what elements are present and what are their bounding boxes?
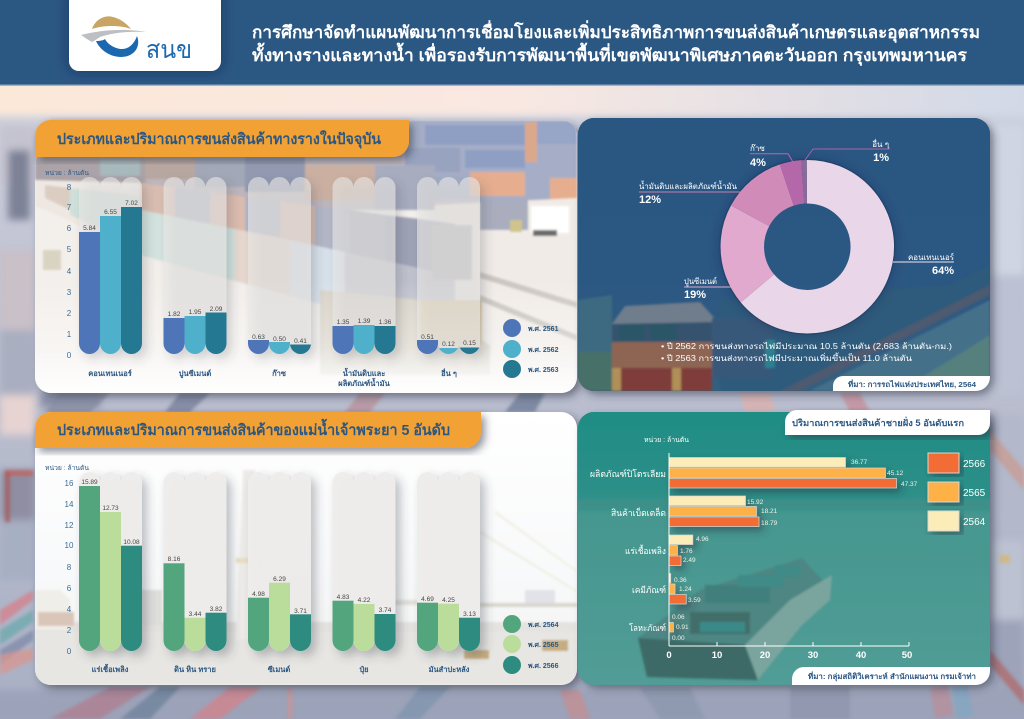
notes: • ปี 2563 การขนส่งทางรถไฟมีประมาณเพิ่มขึ้นเป็น 11.0 ล้านตัน (661, 352, 913, 363)
label: crude oil: 12% (639, 194, 661, 206)
bar value labels: 2.09 (210, 306, 223, 313)
label: crude oil (639, 180, 740, 206)
y axis labels: 4 (67, 267, 72, 276)
logo card (69, 0, 221, 71)
y axis labels: 12 (65, 521, 74, 530)
bar value labels: 1.82 (168, 311, 181, 318)
category names: สินค้าเบ็ดเตล็ด (611, 506, 666, 518)
label: cement: ปูนซีเมนต์ (684, 276, 717, 287)
photo: locomotive and tracks (578, 118, 990, 391)
category labels: ซีเมนต์ (268, 665, 290, 674)
source note (833, 376, 990, 391)
y axis labels: 2 (67, 309, 72, 318)
category labels: น้ำมันดิบและ (343, 367, 385, 378)
bar value labels: 1.35 (337, 319, 350, 326)
y axis labels: 6 (67, 224, 72, 233)
axis numbers: 30 (808, 650, 818, 661)
axis numbers: 40 (856, 650, 866, 661)
y axis labels: 5 (67, 245, 72, 254)
label: gas (750, 143, 793, 169)
label: containers: 64% (932, 265, 954, 277)
photo: containers and train (35, 120, 577, 393)
panel heading: ประเภทและปริมาณการขนส่งสินค้าของแม่น้ำเจ้าพระยา 5 อันดับ (57, 418, 450, 439)
legend: พ.ศ. 2565 (528, 642, 559, 649)
bar value labels: 4.69 (421, 596, 434, 603)
y axis labels: 4 (67, 605, 72, 614)
bar value labels: 3.82 (210, 606, 223, 613)
bar value labels: 3.71 (294, 608, 307, 615)
bar value labels: 5.84 (83, 225, 96, 232)
category labels: แร่เชื้อเพลิง (92, 663, 129, 674)
category labels: ปุ๋ย (359, 665, 369, 674)
bar values: 45.12 (887, 470, 904, 477)
bar values: 1.76 (680, 548, 693, 555)
y axis labels (45, 169, 90, 360)
source note: ที่มา: กลุ่มสถิติวิเคราะห์ สำนักแผนงาน กรมเจ้าท่า (808, 670, 976, 681)
label: cement: 19% (684, 289, 706, 301)
chart heading tab: ปริมาณการขนส่งสินค้าชายฝั่ง 5 อันดับแรก (792, 416, 964, 428)
legend (928, 453, 986, 531)
category names: เคมีภัณฑ์ (632, 584, 666, 595)
bar value labels: 4.83 (337, 594, 350, 601)
y axis labels: 3 (67, 288, 72, 297)
label: crude oil: น้ำมันดิบและผลิตภัณฑ์น้ำมัน (639, 180, 738, 191)
bar value labels: 6.29 (273, 576, 286, 583)
label: others: อื่น ๆ (872, 138, 889, 149)
y axis labels: 16 (65, 479, 74, 488)
bar value labels: 4.25 (442, 597, 455, 604)
y axis labels: หน่วย : ล้านตัน (45, 464, 90, 472)
chart heading tab (785, 410, 990, 435)
y axis labels: 0 (67, 647, 72, 656)
bar value labels: 0.63 (252, 334, 265, 341)
bar value labels: 4.22 (358, 597, 371, 604)
bar values: 36.77 (851, 459, 868, 466)
bar value labels: 0.41 (294, 338, 307, 345)
logo card: สนข (146, 36, 192, 64)
legend: พ.ศ. 2563 (528, 367, 559, 374)
bar value labels (81, 479, 476, 618)
source note: ที่มา: การรถไฟแห่งประเทศไทย, 2564 (848, 378, 977, 389)
category names: ผลิตภัณฑ์ปิโตรเลียม (590, 468, 666, 479)
bar values: 0.00 (672, 635, 685, 642)
bar values: 0.36 (674, 577, 687, 584)
label: gas: ก๊าซ (750, 143, 765, 153)
bar value labels: 12.73 (102, 505, 119, 512)
label: gas: 4% (750, 157, 766, 169)
legend (503, 319, 559, 378)
bar values: 18.21 (761, 508, 778, 515)
y axis labels: 7 (67, 203, 72, 212)
axis numbers (666, 650, 912, 661)
legend: พ.ศ. 2562 (528, 347, 559, 354)
main title (252, 20, 980, 66)
bar values: 47.37 (901, 481, 918, 488)
main title: การศึกษาจัดทำแผนพัฒนาการเชื่อมโยงและเพิ่มประสิทธิภาพการขนส่งสินค้าเกษตรและอุตสาหกรรม (252, 20, 980, 43)
bar value labels: 10.08 (123, 539, 140, 546)
y axis labels: 1 (67, 330, 72, 339)
bar value labels: 8.16 (168, 556, 181, 563)
axis numbers: 50 (902, 650, 912, 661)
bar value labels: 0.50 (273, 336, 286, 343)
donut chart (733, 173, 881, 321)
bar chart values (79, 207, 480, 358)
label: containers (893, 252, 955, 277)
panel heading: ประเภทและปริมาณการขนส่งสินค้าทางรางในปัจจุบัน (57, 130, 382, 149)
bar values: 3.59 (688, 597, 701, 604)
bar values (672, 459, 918, 642)
panel: rail donut chart (578, 118, 990, 391)
category labels: มันสำปะหลัง (429, 665, 470, 674)
bar value labels: 15.89 (81, 479, 98, 486)
y axis labels: 2 (67, 626, 72, 635)
bar value labels: 0.51 (421, 334, 434, 341)
bar value labels: 1.36 (379, 319, 392, 326)
category names: โลหะภัณฑ์ (629, 622, 666, 633)
bar value labels: 6.55 (104, 209, 117, 216)
bar value labels: 1.95 (189, 309, 202, 316)
panel: rail freight (35, 120, 577, 393)
bar value labels: 3.44 (189, 611, 202, 618)
bar value labels: 3.13 (463, 611, 476, 618)
bar value labels: 7.02 (125, 200, 138, 207)
category labels: ปูนซีเมนต์ (179, 369, 211, 379)
legend: 2566 (963, 459, 986, 470)
legend: 2565 (963, 488, 986, 499)
panel heading (35, 412, 481, 448)
label: others (805, 138, 889, 164)
notes (661, 342, 952, 363)
bar values: 0.06 (672, 614, 685, 621)
category labels: อื่น ๆ (441, 367, 457, 378)
y axis labels: 8 (67, 563, 72, 572)
category names: แร่เชื้อเพลิง (625, 544, 666, 556)
legend: พ.ศ. 2566 (528, 663, 559, 670)
header band (0, 0, 1024, 86)
bar value labels (83, 200, 476, 348)
notes: • ปี 2562 การขนส่งทางรถไฟมีประมาณ 10.5 ล้านตัน (2,683 ล้านตัน-กม.) (661, 342, 952, 351)
horizontal bar chart (590, 453, 918, 661)
category labels: ดิน หิน ทราย (174, 665, 216, 674)
bar values: 18.79 (761, 520, 778, 527)
category names (590, 468, 666, 633)
legend: พ.ศ. 2561 (528, 326, 559, 333)
axes (669, 453, 909, 646)
axis numbers: 10 (712, 650, 722, 661)
label: cement (684, 276, 731, 301)
source note (792, 667, 990, 685)
panel heading (35, 120, 409, 157)
legend: พ.ศ. 2564 (528, 622, 559, 629)
category labels: คอนเทนเนอร์ (88, 369, 133, 378)
photo: river and bridge (35, 470, 577, 685)
bar values: 2.49 (683, 557, 696, 564)
unit label: หน่วย : ล้านตัน (644, 436, 689, 444)
bar value labels: 4.98 (252, 591, 265, 598)
y axis labels: 6 (67, 584, 72, 593)
main title: ทั้งทางรางและทางน้ำ เพื่อรองรับการพัฒนาพื้นที่เขตพัฒนาพิเศษภาคตะวันออก กรุงเทพมหานคร (252, 42, 968, 66)
bar values: 15.92 (747, 499, 764, 506)
y axis labels: 8 (67, 183, 72, 192)
bar values: 4.96 (696, 536, 709, 543)
bar value labels: 3.74 (379, 607, 392, 614)
bar chart values (79, 486, 480, 656)
panel: river freight (35, 412, 577, 685)
axis numbers: 0 (666, 650, 672, 661)
y axis labels (45, 464, 90, 656)
bar values: 1.24 (679, 586, 692, 593)
photo: barge on river (578, 412, 990, 685)
y axis labels: หน่วย : ล้านตัน (45, 169, 90, 177)
label: others: 1% (873, 152, 889, 164)
y axis labels: 0 (67, 351, 72, 360)
bar values: 0.91 (676, 624, 689, 631)
category labels: ก๊าซ (272, 369, 286, 378)
bar value labels: 0.12 (442, 341, 455, 348)
bar value labels: 0.15 (463, 340, 476, 347)
category labels (92, 663, 470, 674)
bar value labels: 1.39 (358, 318, 371, 325)
bar chart tracks (79, 472, 480, 651)
bar chart tracks (79, 177, 480, 354)
category labels (88, 367, 457, 388)
label: containers: คอนเทนเนอร์ (908, 252, 955, 262)
panel: coastal freight chart (578, 410, 990, 685)
y axis labels: 14 (65, 500, 74, 509)
category labels: ผลิตภัณฑ์น้ำมัน (338, 377, 391, 388)
legend: 2564 (963, 517, 986, 528)
axis numbers: 20 (760, 650, 770, 661)
y axis labels: 10 (65, 541, 74, 550)
legend (503, 615, 559, 674)
